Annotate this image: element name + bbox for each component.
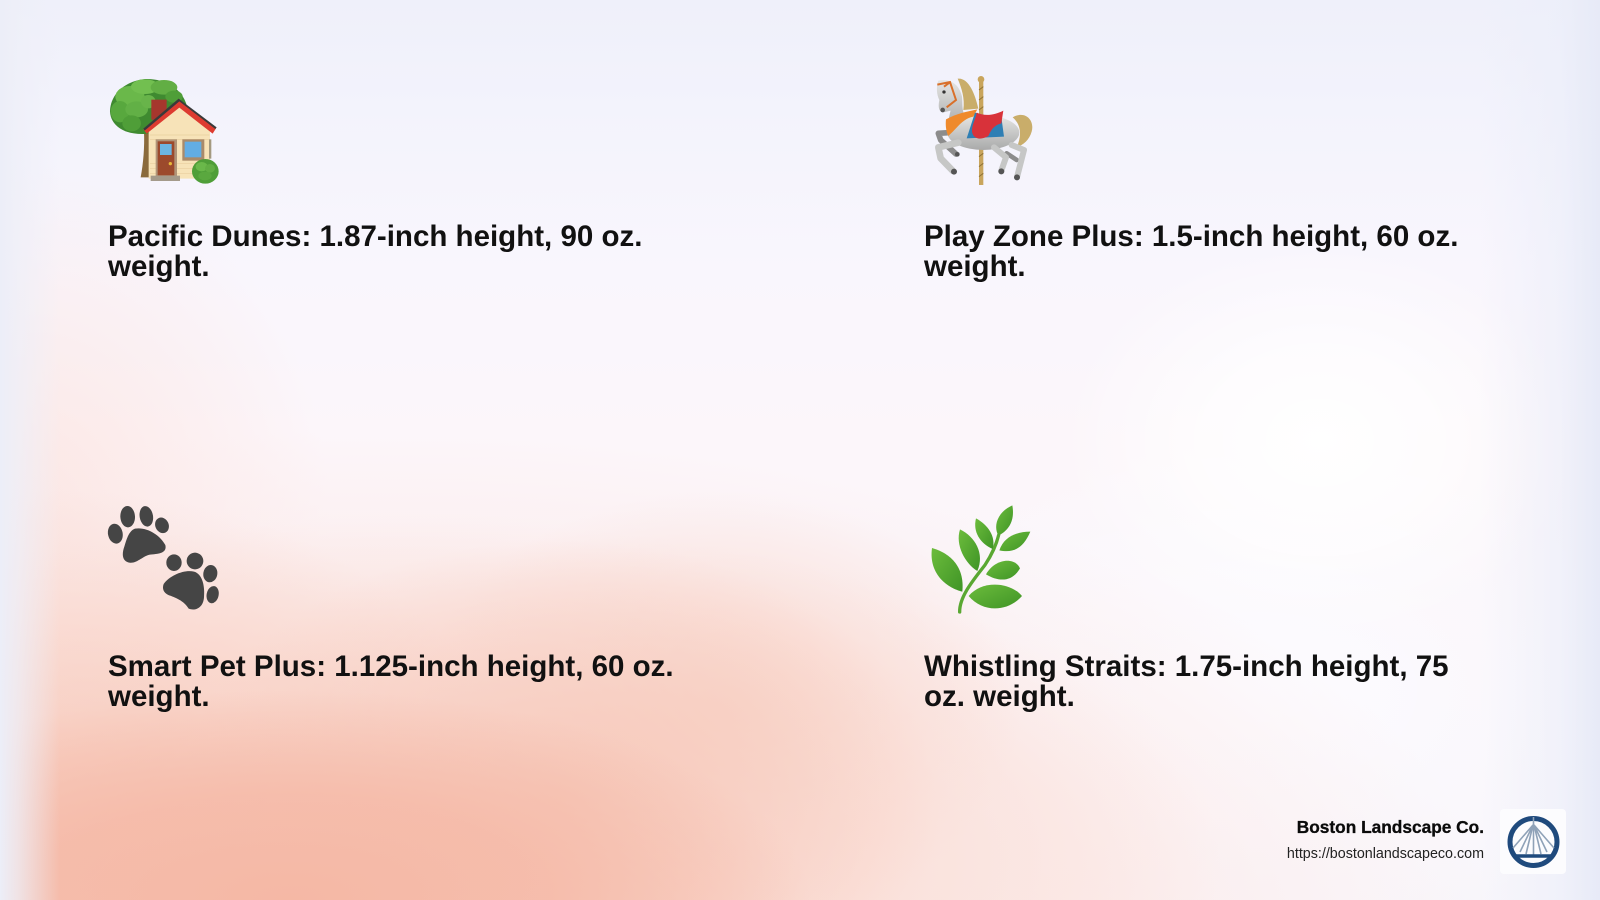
window bbox=[182, 139, 204, 161]
caption: Whistling Straits bbox=[924, 650, 1449, 713]
shrub bbox=[192, 159, 219, 184]
caption: Smart Pet Plus: weight. bbox=[108, 680, 210, 713]
stem bbox=[960, 535, 999, 612]
caption: Play Zone Plus bbox=[924, 220, 1458, 283]
mane bbox=[958, 79, 978, 110]
tree trunk bbox=[141, 132, 149, 177]
lower paw bbox=[163, 551, 220, 609]
icon: herb sprig bbox=[932, 505, 1030, 612]
chimney bbox=[151, 100, 167, 120]
saddle bbox=[972, 111, 1003, 139]
house wall bbox=[149, 105, 210, 179]
caption: Smart Pet Plus: Smart Pet Plus: 1.125-inch height, 60 oz. bbox=[108, 650, 674, 683]
roof bbox=[143, 100, 216, 134]
brand url: https://bostonlandscapeco.com bbox=[1287, 846, 1484, 862]
caption: Smart Pet Plus bbox=[108, 650, 674, 713]
hooves bbox=[940, 108, 1020, 180]
bridle bbox=[937, 82, 956, 107]
eye bbox=[942, 90, 946, 94]
icon: house with tree bbox=[110, 79, 219, 184]
icon: carousel horse bbox=[937, 76, 1032, 185]
tree crown bbox=[110, 79, 187, 134]
upper paw bbox=[106, 505, 171, 563]
tail bbox=[1013, 115, 1032, 147]
caption: Whistling Straits: oz. weight. bbox=[924, 680, 1075, 713]
steps bbox=[151, 176, 180, 181]
caption: Pacific Dunes: weight. bbox=[108, 250, 210, 283]
caption: Pacific Dunes bbox=[108, 220, 642, 283]
icon: paw prints bbox=[106, 505, 220, 609]
caption: Play Zone Plus: Play Zone Plus: 1.5-inch height, 60 oz. bbox=[924, 220, 1458, 253]
caption: Whistling Straits: Whistling Straits: 1.75-inch height, 75 bbox=[924, 650, 1449, 683]
blanket bbox=[967, 113, 1004, 138]
body bbox=[937, 80, 1019, 150]
icon: Boston Landscape logo bbox=[1500, 809, 1566, 874]
caption: Pacific Dunes: Pacific Dunes: 1.87-inch height, 90 oz. bbox=[108, 220, 642, 253]
far legs bbox=[938, 133, 1017, 160]
breast cover bbox=[946, 109, 977, 136]
caption: Play Zone Plus: weight. bbox=[924, 250, 1026, 283]
brand name: Boston Landscape Co. bbox=[1297, 817, 1484, 837]
pole bbox=[978, 76, 984, 185]
leaves bbox=[932, 505, 1030, 608]
near legs bbox=[938, 143, 1024, 176]
door bbox=[156, 139, 177, 176]
